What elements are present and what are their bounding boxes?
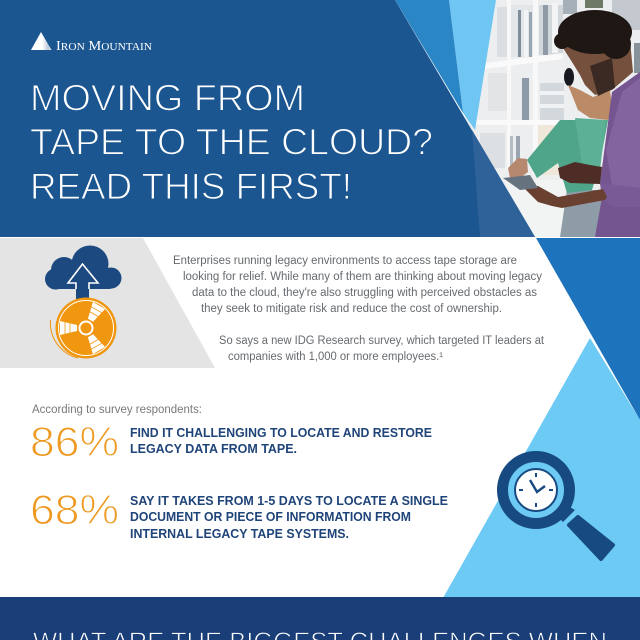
title: TAPE TO THE CLOUD? — [30, 122, 433, 162]
man: hair — [554, 10, 632, 59]
stat: 68%: 68% — [30, 486, 119, 533]
mid blue shard — [395, 0, 463, 113]
title — [30, 78, 433, 207]
intro text: So says a new IDG Research survey, which targeted IT leaders at — [219, 335, 545, 347]
icon: tape reel — [50, 298, 116, 358]
woman: pants — [560, 190, 603, 237]
logo — [31, 32, 152, 54]
intro text: companies with 1,000 or more employees.¹ — [228, 351, 443, 363]
logo mark — [31, 32, 52, 50]
header band — [0, 0, 535, 237]
stat: 68% — [30, 486, 448, 541]
stat: 68%: DOCUMENT OR PIECE OF INFORMATION FROM — [130, 510, 411, 524]
intro text: Enterprises running legacy environments to access tape storage are — [173, 255, 517, 267]
icon: magnifier with clock — [502, 456, 613, 559]
man: purple shirt — [595, 72, 640, 237]
woman: hand on tablet — [508, 158, 528, 178]
icon: cloud upload — [45, 246, 122, 300]
stat: 68%: SAY IT TAKES FROM 1-5 DAYS TO LOCATE A SINGLE — [130, 494, 448, 508]
stat: 86%: FIND IT CHALLENGING TO LOCATE AND RESTORE — [130, 426, 432, 440]
stat: 86%: 86% — [30, 418, 119, 465]
bottom band — [0, 597, 640, 640]
panel: dark blue triangle — [536, 238, 640, 420]
intro text: data to the cloud, they're also struggling with perceived obstacles as — [192, 287, 537, 299]
man: forearm and hand — [525, 186, 607, 208]
intro text — [173, 255, 545, 363]
stat: 68%: INTERNAL LEGACY TAPE SYSTEMS. — [130, 527, 349, 541]
stat: 86%: LEGACY DATA FROM TAPE. — [130, 442, 297, 456]
light blue shard — [449, 0, 496, 130]
gray icon panel — [0, 238, 215, 368]
intro text: they seek to mitigate risk and reduce the cost of ownership. — [201, 303, 502, 315]
panel: light blue shard — [443, 338, 640, 598]
header photo: two colleagues at a bookshelf — [465, 0, 640, 237]
survey lead-in: According to survey respondents: — [32, 404, 202, 416]
intro text: looking for relief. While many of them are thinking about moving legacy — [183, 271, 542, 283]
woman: face — [568, 85, 612, 120]
title: MOVING FROM — [30, 78, 305, 118]
photo overlay shard — [472, 130, 535, 237]
woman: hair — [564, 68, 574, 86]
stat: 86% — [30, 418, 432, 465]
man: neck and face — [564, 46, 633, 95]
logo wordmark: IRON MOUNTAIN — [56, 39, 152, 54]
woman: green shirt — [527, 120, 608, 193]
title: READ THIS FIRST! — [30, 166, 352, 207]
tablet — [503, 175, 538, 190]
